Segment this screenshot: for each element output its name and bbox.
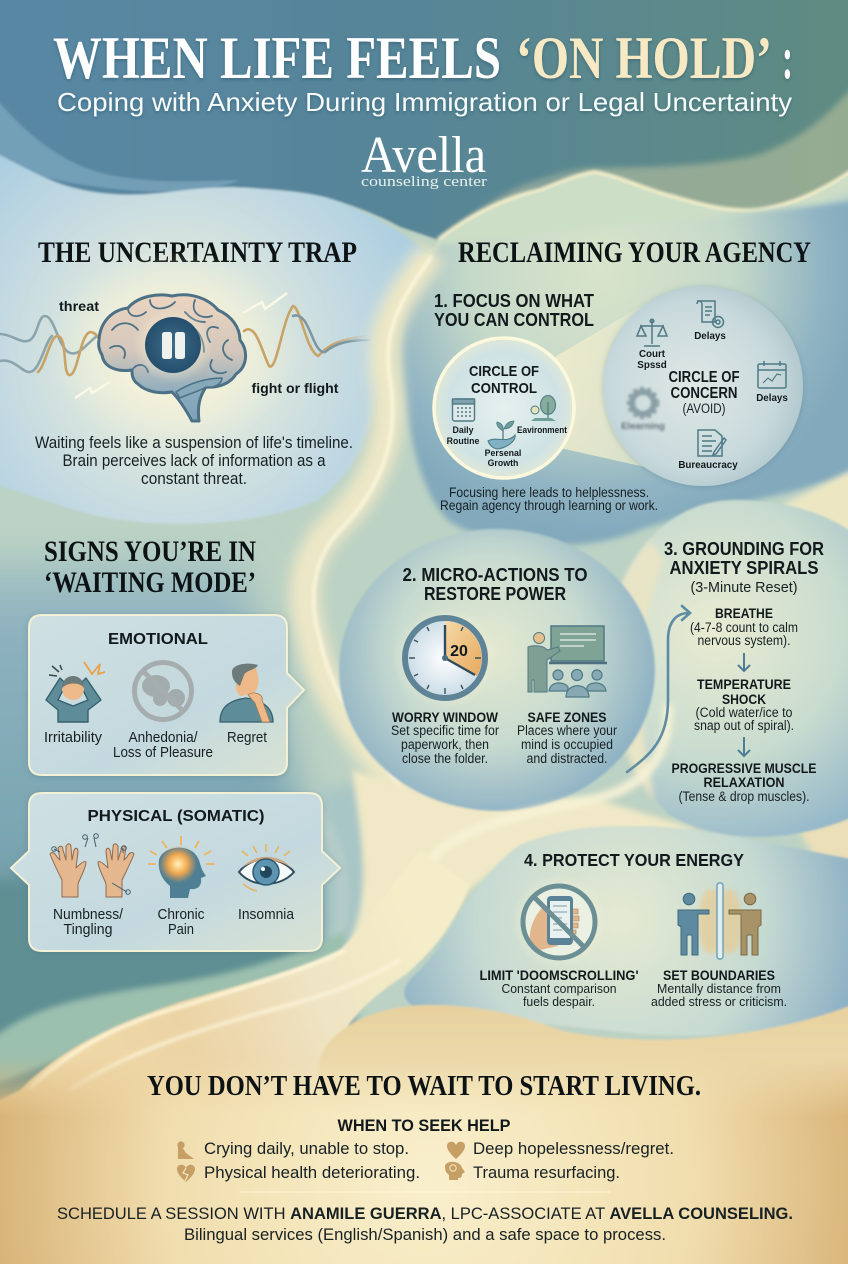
circle of concern: Delays [694,331,726,342]
circle of concern: CIRCLE OF [668,369,740,386]
circle of concern: (AVOID) [682,401,726,416]
help list: Deep hopelessness/regret. [473,1139,674,1158]
heading [664,538,824,578]
limit doomscrolling text: fuels despair. [523,994,595,1009]
icon: calendar [452,399,474,421]
panel 4 [404,826,848,1036]
help list: Trauma resurfacing. [473,1163,620,1182]
step: temperature shock [694,677,794,733]
circle of concern: Spssd [637,360,667,371]
gold blob [318,990,848,1150]
heading: 3. GROUNDING FOR [664,538,824,559]
subtitle: Coping with Anxiety During Immigration or Legal Uncertainty [57,87,792,117]
logo: Avella counseling center: Avella [361,127,486,184]
icon: blurred gear [621,388,665,432]
card: emotional: Regret [227,730,267,746]
green wisp [0,930,345,1090]
heading: THE UNCERTAINTY TRAP [38,236,357,269]
title: : [782,25,793,91]
title: ‘ON HOLD’ [516,25,772,91]
set boundaries text [651,968,787,1009]
step: progressive muscle relaxation: PROGRESSIVE MUSCLE [672,761,816,776]
label: fight or flight: fight or flight [252,380,339,396]
title: WHEN LIFE FEELS [53,25,501,91]
body text [35,434,353,488]
step: temperature shock: SHOCK [722,692,766,707]
body text: constant threat. [141,470,247,488]
step: temperature shock: snap out of spiral). [694,718,794,733]
step: progressive muscle relaxation: RELAXATION [704,775,784,790]
help list [177,1139,674,1182]
circle of concern: CONCERN [670,385,738,402]
card: emotional: EMOTIONAL [108,631,208,648]
heading: ANXIETY SPIRALS [670,557,818,578]
card: physical: Chronic [158,907,204,923]
worry window text [391,710,499,766]
card: physical: Insomnia [238,907,295,923]
icon: tree [531,396,556,421]
panel 3 [611,500,848,837]
panel 2 [339,529,655,811]
limit doomscrolling text: Constant comparison [502,981,616,996]
left lower field [0,560,330,1100]
circle of control: Growth [488,458,518,468]
card: emotional: Loss of Pleasure [113,745,213,761]
limit doomscrolling text: LIMIT 'DOOMSCROLLING' [480,968,638,983]
panel: protect your energy [480,850,787,1009]
icon: anhedonia [134,662,192,720]
heading: ‘WAITING MODE’ [44,566,256,599]
circle of control: Daily [452,425,474,435]
icon: scales [637,319,667,346]
central cream field [345,770,700,975]
arrow down [738,653,750,671]
icon: calendar chart [758,361,786,388]
step: breathe [690,606,798,648]
card: physical: PHYSICAL (SOMATIC) [88,808,264,825]
card: physical [11,793,340,951]
arrow: loop back [627,606,690,772]
closing headline: YOU DON’T HAVE TO WAIT TO START LIVING. [147,1071,701,1102]
card: emotional [29,615,304,775]
card: emotional: Anhedonia/ [128,730,198,746]
icon: classroom [528,626,607,697]
step: breathe: (4-7-8 count to calm [690,620,798,635]
limit doomscrolling text [480,968,638,1009]
icon: numb hands [50,834,134,897]
circle of control: Persenal [485,448,521,458]
panel: reclaiming your agency [434,236,811,513]
left light panel [0,145,425,524]
bottom gold field [0,1040,848,1264]
caption [440,485,658,513]
safe zones text: mind is occupied [521,737,613,752]
arrow down [738,737,750,756]
icon: no phone [511,874,607,970]
white swoosh from panel 2 to stream [390,705,668,940]
step: temperature shock: TEMPERATURE [697,677,791,692]
label: threat: threat [59,299,100,314]
card: emotional: Irritability [44,730,103,746]
pause button [145,317,201,373]
safe zones text: and distracted. [526,751,608,766]
circle of concern [603,286,803,486]
heading: SIGNS YOU’RE IN [44,535,256,568]
waves [0,306,372,375]
brain icon [99,295,246,421]
worry window text: close the folder. [402,751,488,766]
card: physical: Pain [168,922,194,938]
circle of control: CIRCLE OF [469,363,539,380]
heading: RESTORE POWER [424,583,566,604]
worry window text: WORRY WINDOW [392,710,498,725]
card: physical: Tingling [64,922,112,938]
safe zones text: Places where your [517,723,617,738]
circle of control: CONTROL [471,380,537,397]
circle of control: Eavironment [517,425,567,435]
icon: chronic pain head [148,836,215,898]
panel: closing call to action [57,1071,793,1244]
panel: grounding [627,538,824,804]
glow behind brain [49,250,299,450]
panel: signs you're in waiting mode [11,535,340,951]
body text: Waiting feels like a suspension of life's timeline. [35,434,353,452]
safe zones text: SAFE ZONES [528,710,606,725]
heading: 2. MICRO-ACTIONS TO [402,564,588,585]
right pale field [400,162,848,340]
body text: Brain perceives lack of information as a [62,452,326,470]
cone connector [553,301,650,467]
panel: the uncertainty trap [0,236,372,488]
circle of concern: Delays [756,393,788,404]
circle of control [434,338,574,478]
heading [44,535,256,599]
panel: micro-actions [391,564,617,766]
icon: crying person [177,1141,194,1159]
step: progressive muscle relaxation: (Tense & drop muscles). [678,789,810,804]
icon: broken heart [177,1165,195,1182]
reclaiming panel [402,200,848,546]
set boundaries text: added stress or criticism. [651,994,787,1009]
circle of concern: Court [639,349,666,360]
logo: Avella counseling center: counseling center [361,174,487,190]
caption: Regain agency through learning or work. [440,498,658,513]
heading: 4. PROTECT YOUR ENERGY [524,850,744,870]
icon: clock with 20 minute wedge [393,606,497,710]
panel: grounding: (3-Minute Reset) [690,580,798,596]
icon: regret [220,664,273,722]
step: progressive muscle relaxation [672,761,816,804]
step: breathe: nervous system). [698,633,790,648]
icon: heart [447,1142,465,1159]
icon: plant in hand [488,421,515,449]
divider glow [240,1191,610,1193]
cream wedge right [780,462,848,540]
step: temperature shock: (Cold water/ice to [696,705,792,720]
icon: blurred gear: Elearning [621,421,665,432]
sparks [243,293,287,313]
icon: document and pen [698,430,726,456]
help list: Crying daily, unable to stop. [204,1139,409,1158]
help list: Physical health deteriorating. [204,1163,420,1182]
circle of concern: Bureaucracy [678,460,738,471]
peach stream [0,850,470,1150]
schedule line: SCHEDULE A SESSION WITH ANAMILE GUERRA, LPC-ASSOCIATE AT AVELLA COUNSELING. [57,1204,793,1223]
step: breathe: BREATHE [715,606,773,621]
cream ribbon main [305,252,432,800]
when to seek help heading: WHEN TO SEEK HELP [338,1117,510,1135]
caption: Focusing here leads to helplessness. [449,485,649,500]
set boundaries text: Mentally distance from [657,981,781,996]
step 1 heading [434,290,595,330]
worry window text: paperwork, then [401,737,489,752]
step 1 heading: YOU CAN CONTROL [434,309,594,330]
bilingual line: Bilingual services (English/Spanish) and a safe space to process. [184,1225,666,1244]
set boundaries text: SET BOUNDARIES [663,968,775,983]
heading [402,564,588,604]
worry window text: Set specific time for [391,723,499,738]
card: physical: Numbness/ [53,907,124,923]
safe zones text [517,710,617,766]
icon: eye [239,844,294,891]
icon: document with seal [697,301,724,328]
icon: irritability [46,662,105,722]
icon: boundary figures [678,883,761,959]
step 1 heading: 1. FOCUS ON WHAT [434,290,595,311]
icon: clock with 20 minute wedge: 20 [450,643,468,660]
circle of control: Routine [447,436,479,446]
icon: head with brain [445,1162,465,1180]
